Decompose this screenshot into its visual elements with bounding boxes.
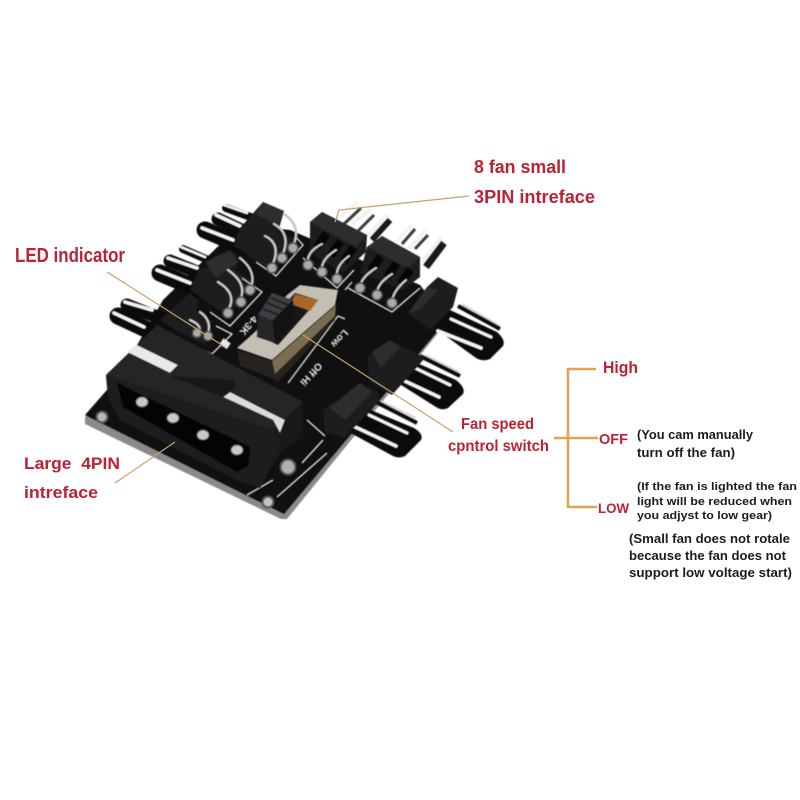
label: large 4PIN interface: Large 4PIN [24, 454, 120, 473]
fan header H: right lower [323, 383, 422, 458]
circuit board [85, 225, 447, 519]
leader line: fan speed switch [303, 335, 453, 432]
note: LOW position light: light will be reduced when [637, 496, 792, 508]
fan header A: upper left [202, 202, 303, 276]
note: OFF position [637, 427, 754, 460]
note: OFF position: turn off the fan) [637, 445, 735, 460]
note: LOW position light [637, 481, 797, 522]
large 4-pin molex connector [106, 325, 303, 488]
label: fan speed control switch: cpntrol switch [448, 438, 549, 455]
note: small fan low voltage: support low voltage start) [629, 565, 792, 580]
label: 8 fan small 3PIN interface: 8 fan small [474, 157, 566, 177]
position label: OFF: OFF [599, 431, 628, 448]
slide switch [237, 285, 338, 382]
label: 8 fan small 3PIN interface: 3PIN intreface [474, 187, 595, 207]
leader line: 8 fan 3PIN interface [335, 196, 469, 222]
label: large 4PIN interface: intreface [24, 483, 98, 502]
position label: High: High [603, 358, 638, 377]
label: 8 fan small 3PIN interface [474, 157, 595, 207]
label: large 4PIN interface [24, 454, 120, 502]
silk-screen labels on board [236, 313, 350, 388]
fan header D: top row first [303, 203, 390, 288]
position label: LOW: LOW [598, 500, 630, 516]
fan header E: top row second [348, 226, 444, 312]
note: LOW position light: you adjyst to low gear) [637, 510, 772, 522]
silk-screen labels on board: Low [328, 327, 350, 349]
fan header C: lower left [114, 293, 232, 354]
note: OFF position: (You cam manually [637, 427, 754, 442]
note: LOW position light: (If the fan is lighted the fan [637, 481, 797, 493]
label: fan speed control switch [448, 416, 549, 455]
fan header F: right upper [408, 277, 504, 360]
product photo: fan hub board [85, 202, 504, 519]
leader line: large 4PIN interface [115, 442, 175, 483]
note: small fan low voltage: (Small fan does not rotale [629, 531, 790, 546]
LED pad [219, 338, 231, 349]
label: LED indicator: LED indicator [15, 245, 125, 267]
silk-screen labels on board: Off Hi [297, 360, 324, 388]
note: small fan low voltage [629, 531, 792, 580]
fan header B: middle left [157, 247, 262, 326]
note: small fan low voltage: because the fan does not [629, 548, 787, 563]
leader line: LED indicator [107, 272, 222, 345]
label: fan speed control switch: Fan speed [461, 416, 534, 433]
switch position bracket [554, 369, 598, 507]
silk-screen labels on board: 4-3K [236, 313, 259, 337]
fan header G: right middle [367, 340, 464, 409]
